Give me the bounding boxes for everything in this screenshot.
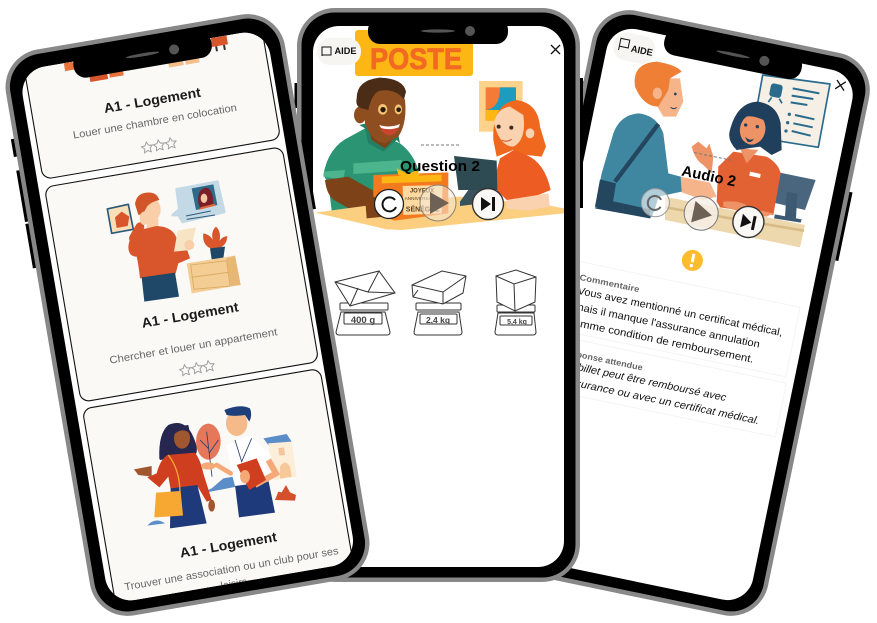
heading: Question 2: Question 2 [400,158,480,175]
icon: scale with box 5,4 kg: 5,4 kg [507,319,527,326]
card: chercher et louer [44,147,319,402]
box: réponse attendue: Réponse attendue [564,347,644,373]
illustration: post office scene: SÉNÉGAL [406,204,440,213]
sign: POSTE: POSTE [370,43,462,76]
card: louer une chambre: A1 - Logement [103,85,202,116]
card: louer une chambre: Louer une chambre en colocation [72,102,238,142]
button: play [420,185,456,221]
heading: Audio 2: Audio 2 [680,163,737,190]
icon: scale with parcel 2,4 kg: 2,4 kg [426,315,450,325]
icon: scale with envelope 400 g: 400 g [351,315,375,326]
card: louer une chambre [26,32,280,179]
card: trouver une association: Trouver une association ou un club pour ses [124,545,339,593]
box: commentaire: mais il manque l'assurance annulation [573,301,761,351]
button: replay [374,190,404,218]
card: chercher et louer: Chercher et louer un appartement [109,326,278,367]
card: trouver une association: A1 - Logement [179,529,278,561]
button: play [684,196,719,231]
card: trouver une association: loisirs [220,576,248,592]
box: commentaire [580,262,800,377]
box: commentaire: comme condition de remboursement. [567,316,755,366]
phone: audio feedback (right) [554,10,870,616]
card: chercher et louer: A1 - Logement [140,299,240,331]
card: trouver une association [83,369,352,600]
button: replay [640,188,670,218]
box: commentaire: Vous avez mentionné un certificat médical, [577,285,784,339]
box: commentaire: Commentaire [579,272,641,294]
icon: scale with box 5,4 kg [495,270,536,335]
illustration: post office scene: ANNIVERSAIRE [405,196,439,201]
box: réponse attendue: Le billet peut être remboursé avec [561,358,728,404]
illustration: two people talking [134,406,297,528]
icon: close [551,45,560,54]
box: réponse attendue [580,340,787,438]
illustration: man on phone [107,182,241,302]
chip: AIDE [614,32,655,64]
icon: scale with parcel 2,4 kg [412,271,466,335]
phone: lessons list (left) [0,8,379,623]
illustration: post office scene [315,78,564,230]
dashed line [421,144,459,146]
chip: AIDE: AIDE [630,44,654,59]
phone: question (middle) [294,8,583,582]
icon: close [835,80,846,91]
icon: scale with envelope 400 g [335,271,395,335]
sign: POSTE [355,30,473,76]
chip: AIDE [317,38,361,65]
button: next [472,188,504,220]
chip: AIDE: AIDE [334,46,356,57]
illustration: train station counter [595,62,830,247]
icon: warning [682,250,703,271]
illustration: post office scene: JOYEUX [410,189,434,195]
button: next [732,206,765,238]
box: réponse attendue: l'assurance ou avec un certificat médical. [558,374,760,427]
dashed line [694,153,732,160]
